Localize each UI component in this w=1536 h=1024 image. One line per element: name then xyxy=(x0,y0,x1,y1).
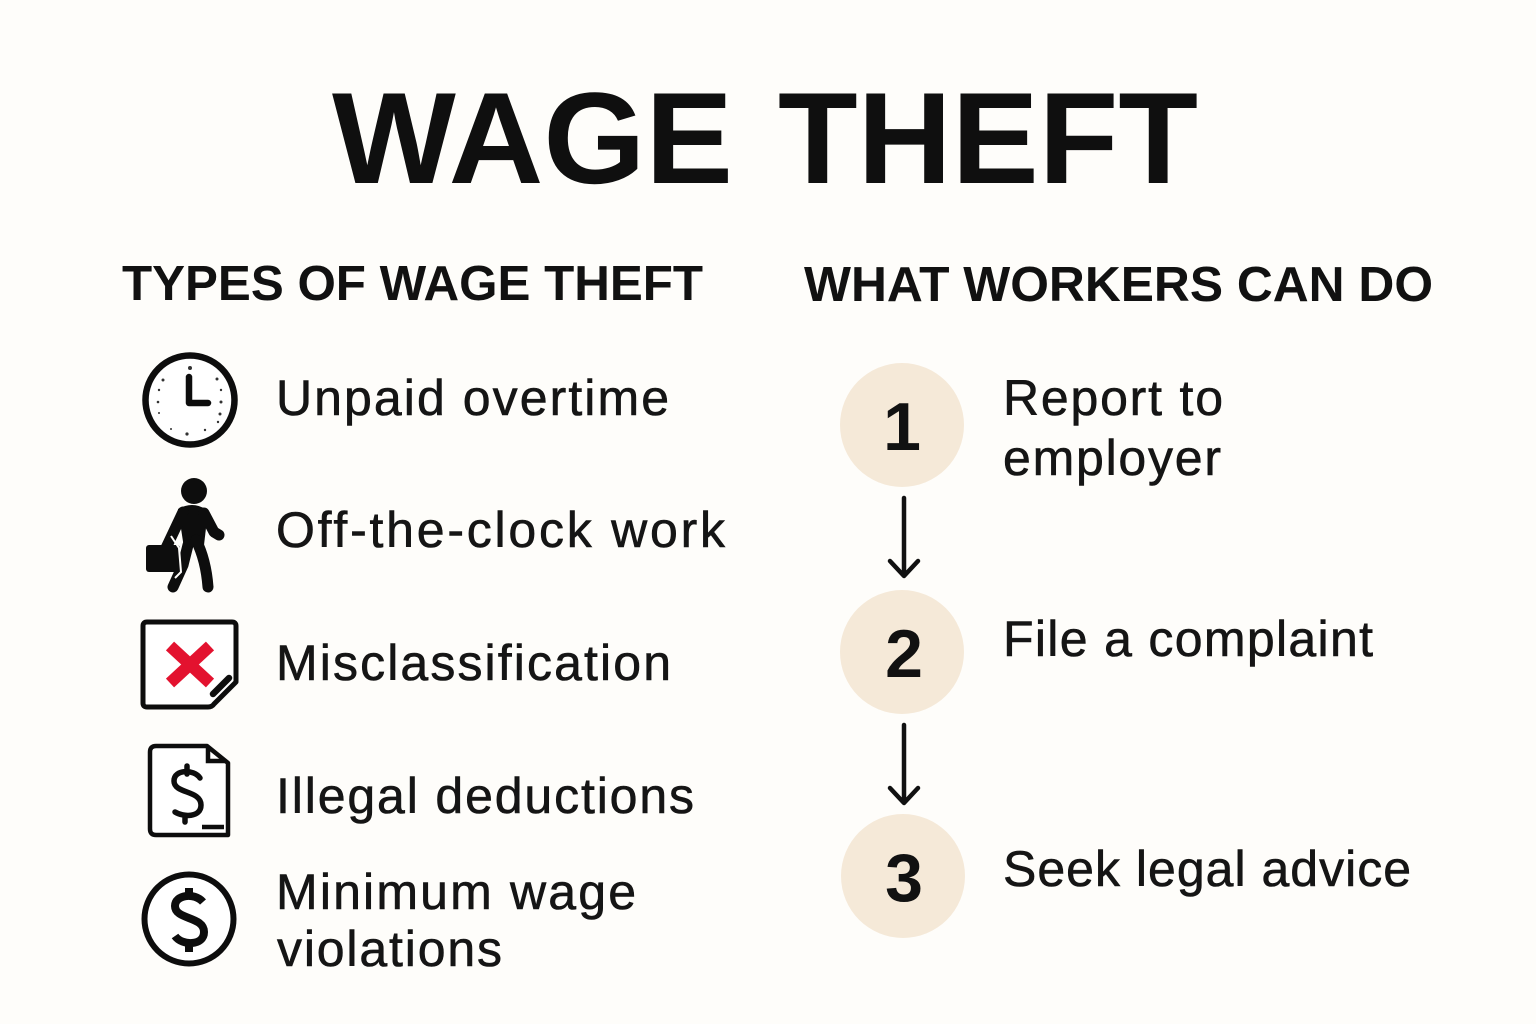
label: misclassification: Misclassification xyxy=(276,635,671,691)
label: unpaid overtime: Unpaid overtime xyxy=(276,370,669,426)
step 3 badge: 3 xyxy=(885,840,923,916)
heading: what workers can do: WHAT WORKERS CAN DO xyxy=(804,258,1433,312)
label: minimum wage violations xyxy=(276,864,636,977)
step 3 badge xyxy=(841,814,965,938)
label: illegal deductions: Illegal deductions xyxy=(276,768,694,824)
step 2 badge: 2 xyxy=(885,616,923,692)
icon: document with dollar sign xyxy=(150,746,228,835)
step 3 text: Seek legal advice xyxy=(1003,841,1411,897)
label: minimum wage violations: Minimum wage xyxy=(276,864,636,920)
step 1 text: Report to xyxy=(1003,370,1223,426)
heading: types of wage theft: TYPES OF WAGE THEFT xyxy=(122,257,703,311)
step 1 text: employer xyxy=(1003,430,1221,486)
arrow: step 2 to 3 xyxy=(890,725,918,803)
step 1 text xyxy=(1003,370,1223,486)
label: off-the-clock work: Off-the-clock work xyxy=(276,502,726,558)
icon: walking worker with briefcase xyxy=(146,478,219,587)
icon: form with red cross xyxy=(143,622,236,707)
step 2 text: File a complaint xyxy=(1003,611,1373,667)
panel: what workers can do xyxy=(840,363,1411,938)
arrow: step 1 to 2 xyxy=(890,498,918,576)
label: minimum wage violations: violations xyxy=(277,921,502,977)
icon: dollar coin xyxy=(144,874,234,964)
title: THEFT xyxy=(778,65,1198,211)
panel: types of wage theft xyxy=(143,356,726,977)
title: WAGE xyxy=(332,65,733,211)
step 1 badge: 1 xyxy=(883,389,921,465)
title xyxy=(332,65,1198,211)
step 1 badge xyxy=(840,363,964,487)
icon: clock xyxy=(146,356,234,444)
step 2 badge xyxy=(840,590,964,714)
